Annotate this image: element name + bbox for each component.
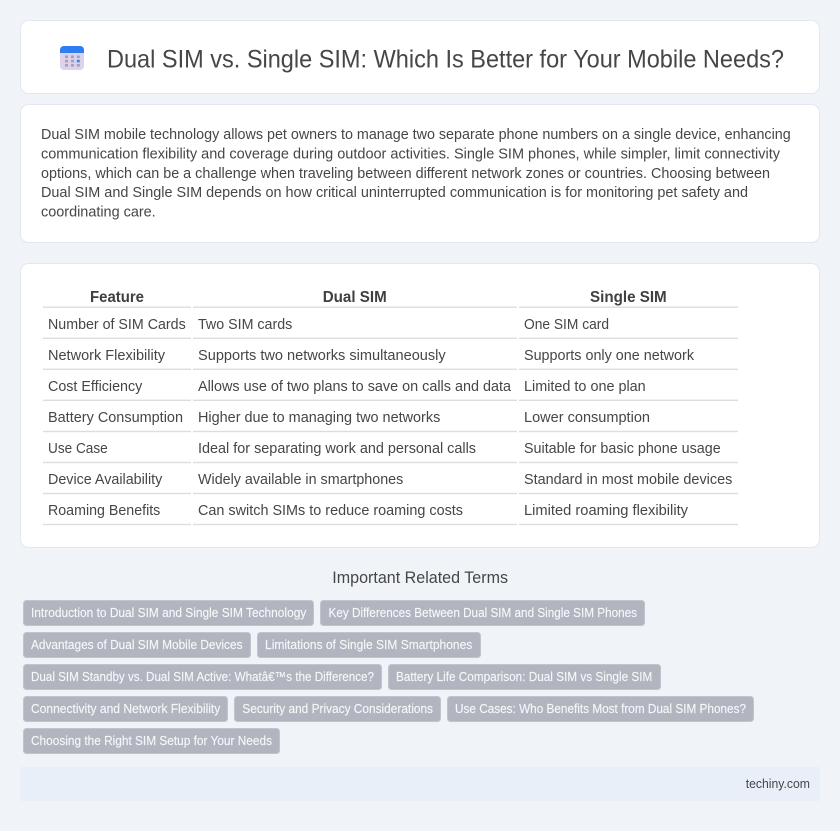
table header row: Single SIM [590, 289, 667, 306]
tag: connectivity [24, 696, 228, 722]
table header row: Dual SIM [323, 289, 387, 306]
table header row [43, 289, 738, 308]
intro card [20, 104, 820, 242]
tag: choosing: Choosing the Right SIM Setup for Your Needs [31, 734, 272, 748]
header card [20, 20, 820, 94]
tag: key differences [320, 600, 644, 626]
footer site name: techiny.com [746, 776, 810, 791]
panel: important related terms [24, 569, 754, 754]
table row: roaming benefits [43, 503, 738, 525]
table row: cost efficiency [43, 379, 738, 401]
table card [20, 264, 820, 548]
table row: use case: Suitable for basic phone usage [524, 441, 721, 457]
tag: battery life [388, 664, 660, 690]
table row: network flexibility: Supports two networks simultaneously [198, 348, 446, 364]
title: Dual SIM vs. Single SIM: Which Is Better for Your Mobile Needs? [107, 46, 784, 74]
table row: roaming benefits: Limited roaming flexibility [524, 503, 689, 519]
table header row: Feature [90, 289, 144, 306]
tag: advantages [24, 632, 250, 658]
table row: roaming benefits: Roaming Benefits [48, 503, 160, 519]
table row: device availability: Device Availability [48, 472, 163, 488]
tag: limitations: Limitations of Single SIM Smartphones [265, 638, 472, 652]
table row: number of SIM cards: One SIM card [524, 317, 609, 333]
intro paragraph: Dual SIM and Single SIM depends on how critical uninterrupted communication is for monitoring pet safety and [41, 185, 748, 201]
tag: key differences: Key Differences Between Dual SIM and Single SIM Phones [328, 606, 637, 620]
table row: battery consumption: Battery Consumption [48, 410, 183, 426]
tag: security [234, 696, 440, 722]
intro paragraph [41, 127, 791, 221]
table row: battery consumption [43, 410, 738, 432]
tag: standby vs active [24, 664, 382, 690]
table row: device availability: Widely available in smartphones [198, 472, 403, 488]
tag: limitations [258, 632, 480, 658]
tag: standby vs active: Dual SIM Standby vs. Dual SIM Active: Whatâ€™s the Difference? [31, 670, 374, 684]
table row: roaming benefits: Can switch SIMs to reduce roaming costs [198, 503, 463, 519]
tag: use cases [448, 696, 754, 722]
table row: network flexibility: Supports only one network [524, 348, 695, 364]
table row: use case: Use Case [48, 441, 108, 457]
table row: number of SIM cards: Number of SIM Cards [48, 317, 186, 333]
panel: comparison table [20, 264, 820, 548]
table row: device availability [43, 472, 738, 494]
table row: network flexibility [43, 348, 738, 370]
footer bar [20, 767, 820, 801]
table row: device availability: Standard in most mobile devices [524, 472, 732, 488]
table row: number of SIM cards: Two SIM cards [198, 317, 292, 333]
panel: introduction [20, 104, 820, 242]
intro paragraph: coordinating care. [41, 205, 156, 221]
table row: battery consumption: Lower consumption [524, 410, 650, 426]
panel: title header [20, 20, 820, 94]
tag: introduction: Introduction to Dual SIM and Single SIM Technology [31, 606, 307, 620]
tag: battery life: Battery Life Comparison: Dual SIM vs Single SIM [396, 670, 652, 684]
table row: use case [43, 441, 738, 463]
footer [20, 767, 820, 801]
intro paragraph: communication flexibility and coverage during outdoor activities. Single SIM phones, while simpler, limit connectivity [41, 146, 781, 162]
table row: cost efficiency: Allows use of two plans to save on calls and data [198, 379, 512, 395]
intro paragraph: options, which can be a challenge when traveling between different network zones or countries. Choosing between [41, 166, 770, 182]
tag: advantages: Advantages of Dual SIM Mobile Devices [31, 638, 242, 652]
tag: connectivity: Connectivity and Network Flexibility [31, 702, 221, 716]
section heading: Important Related Terms [332, 569, 508, 587]
table row: cost efficiency: Cost Efficiency [48, 379, 143, 395]
icon: calendar [60, 46, 84, 70]
table row: battery consumption: Higher due to managing two networks [198, 410, 440, 426]
table row: use case: Ideal for separating work and personal calls [198, 441, 476, 457]
tag: choosing [24, 728, 280, 754]
tag: introduction [24, 600, 314, 626]
table row: number of SIM cards [43, 317, 738, 339]
table row: network flexibility: Network Flexibility [48, 348, 166, 364]
intro paragraph: Dual SIM mobile technology allows pet owners to manage two separate phone numbers on a single device, enhancing [41, 127, 791, 143]
table row: cost efficiency: Limited to one plan [524, 379, 646, 395]
tag: security: Security and Privacy Considerations [242, 702, 433, 716]
tag: use cases: Use Cases: Who Benefits Most from Dual SIM Phones? [455, 702, 746, 716]
